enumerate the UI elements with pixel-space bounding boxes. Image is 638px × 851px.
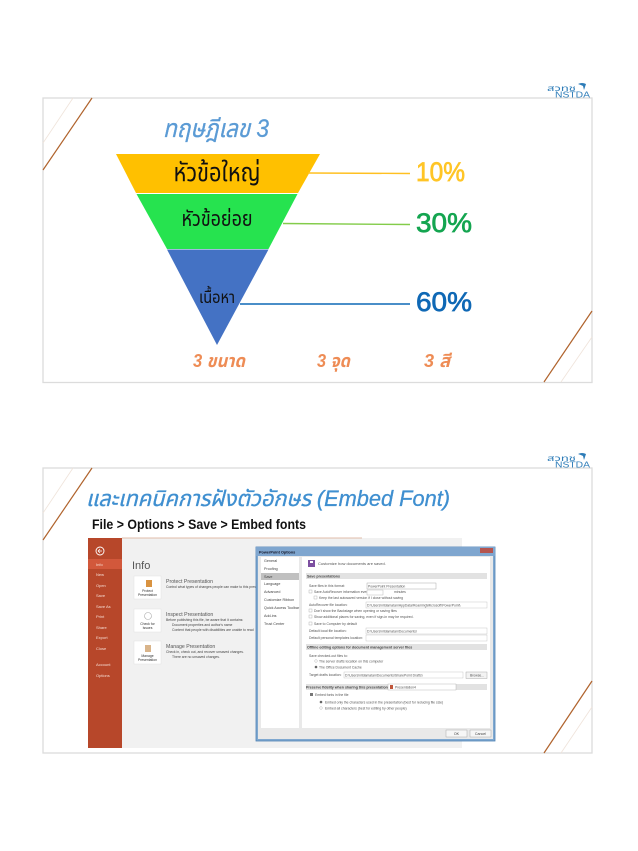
funnel tier: main heading: หัวข้อใหญ่: [174, 157, 260, 187]
info content: Presentation: [138, 593, 157, 597]
heading: rule of three: ทฤษฎีเลข 3: [163, 115, 269, 143]
options dialog: PowerPoint Options: [259, 550, 295, 554]
options save settings: AutoRecover file location:: [309, 603, 348, 607]
info content: Issues: [143, 626, 153, 630]
options category list: Save: [264, 575, 272, 579]
logo: NSTDA: [547, 83, 591, 100]
options category list: General: [264, 559, 277, 563]
backstage sidebar: Save: [96, 593, 106, 598]
dialog buttons: [446, 730, 491, 737]
backstage background: [88, 538, 462, 748]
options category list: Language: [264, 582, 280, 586]
options save settings: The Office Document Cache: [319, 666, 362, 670]
options save settings: Keep the last autosaved version if I close without saving: [319, 596, 403, 600]
options category list: Trust Center: [264, 622, 285, 626]
funnel tier: content: [167, 250, 268, 345]
info content: Check in, check out, and recover unsaved changes.: [166, 650, 244, 654]
info content: Manage Presentation: [166, 644, 215, 650]
options save settings: D:\Users\nitdamatan\Documents\: [367, 630, 417, 634]
options category list: Add-ins: [264, 614, 277, 618]
caption: 3 colours: 3 สี: [424, 351, 453, 371]
info content: Protect Presentation: [166, 579, 213, 585]
subheading: menu path: File > Options > Save > Embed fonts: [92, 516, 306, 532]
info content: Presentation: [138, 658, 157, 662]
panel: slide 1 rule of three: [43, 83, 592, 382]
options save settings: Save files in this format:: [309, 584, 345, 588]
backstage sidebar: Export: [96, 635, 108, 640]
options save settings: Preserve fidelity when sharing this presentation:: [306, 686, 389, 690]
options save settings: Default personal templates location:: [309, 636, 363, 640]
funnel tier: main heading: [116, 154, 320, 193]
backstage sidebar: [88, 538, 122, 748]
logo: NSTDA: NSTDA: [555, 90, 591, 100]
options save settings: D:\Users\nitdamatan\AppData\Roaming\Microsoft\PowerPoint\: [367, 604, 461, 608]
info content: Protect: [142, 589, 153, 593]
logo: NSTDA: [547, 453, 591, 470]
heading: embed font technique: และเทคนิคการฝังตัวอักษร (Embed Font): [86, 486, 450, 511]
funnel tier: subheading: หัวข้อย่อย: [182, 207, 252, 231]
options save settings: The server drafts location on this computer: [319, 660, 384, 664]
info content: Manage: [141, 654, 154, 658]
backstage sidebar: Print: [96, 614, 105, 619]
panel: slide 2 embed fonts: [43, 453, 592, 753]
info content: Content that people with disabilities are unable to read: [172, 628, 254, 632]
options category list: Quick Access Toolbar: [264, 606, 300, 610]
options save settings: minutes: [394, 590, 406, 594]
options save settings: Save checked-out files to:: [309, 654, 348, 658]
funnel tier: subheading: [136, 194, 298, 249]
logo: NSTDA: NSTDA: [555, 460, 591, 470]
options save settings: PowerPoint Presentation: [368, 584, 405, 588]
leader line and label: 30%: 30%: [416, 208, 472, 238]
backstage sidebar: Account: [96, 662, 111, 667]
caption: 3 sizes: 3 ขนาด: [193, 351, 246, 371]
backstage sidebar: Share: [96, 625, 107, 630]
info content: Before publishing this file, be aware that it contains:: [166, 618, 243, 622]
backstage sidebar: Close: [96, 646, 107, 651]
options save settings: Browse...: [470, 674, 484, 678]
options save settings: Save presentations: [307, 574, 340, 578]
options save settings: Offline editing options for document management server files: [307, 646, 412, 650]
options save settings: Customize how documents are saved.: [318, 561, 386, 566]
info content: Document properties and author's name: [172, 623, 233, 627]
backstage sidebar: Info: [96, 562, 103, 567]
options save settings: Presentation4: [395, 686, 416, 690]
options save settings: Don't show the Backstage when opening or saving files: [314, 609, 397, 613]
options save settings: Show additional places for saving, even if sign-in may be required.: [314, 615, 414, 619]
options save settings: Embed only the characters used in the presentation (best for reducing file size): [325, 700, 443, 704]
options category list: [261, 557, 300, 728]
leader line and label: 60%: 60%: [416, 287, 472, 317]
info content: Inspect Presentation: [166, 612, 213, 618]
caption: 3 points: 3 จุด: [317, 351, 351, 372]
backstage sidebar: Options: [96, 673, 110, 678]
backstage sidebar: New: [96, 572, 104, 577]
options category list: Advanced: [264, 590, 280, 594]
dialog buttons: Cancel: [475, 732, 486, 736]
options save settings: Target drafts location:: [309, 673, 341, 677]
leader line and label: 10%: 10%: [416, 157, 465, 187]
info content: [132, 560, 269, 664]
info content: Control what types of changes people can make to this presentation.: [166, 585, 269, 589]
backstage sidebar: Save As: [96, 604, 111, 609]
logo: NSTDA: สวทช: [547, 454, 576, 463]
funnel chart: [116, 154, 320, 345]
options category list: Customize Ribbon: [264, 598, 294, 602]
info content: Info: [132, 560, 150, 572]
screenshot: PowerPoint info and options: [88, 538, 495, 748]
options save settings: D:\Users\nitdamatan\Documents\SharePoint Drafts\: [345, 674, 423, 678]
options save settings: Save to Computer by default: [314, 622, 357, 626]
info content: There are no unsaved changes.: [172, 655, 220, 659]
info content: Check for: [140, 622, 156, 626]
logo: NSTDA: สวทช: [547, 84, 576, 93]
backstage sidebar: Open: [96, 583, 106, 588]
options category list: Proofing: [264, 567, 278, 571]
options save settings: [302, 557, 490, 728]
options dialog: [256, 547, 495, 741]
options save settings: Embed fonts in the file: [315, 693, 349, 697]
options save settings: Default local file location:: [309, 629, 347, 633]
dialog buttons: OK: [454, 732, 460, 736]
funnel tier: content: เนื้อหา: [199, 285, 235, 307]
options save settings: Embed all characters (best for editing by other people): [325, 706, 407, 710]
options save settings: Save AutoRecover information every: [314, 590, 369, 594]
